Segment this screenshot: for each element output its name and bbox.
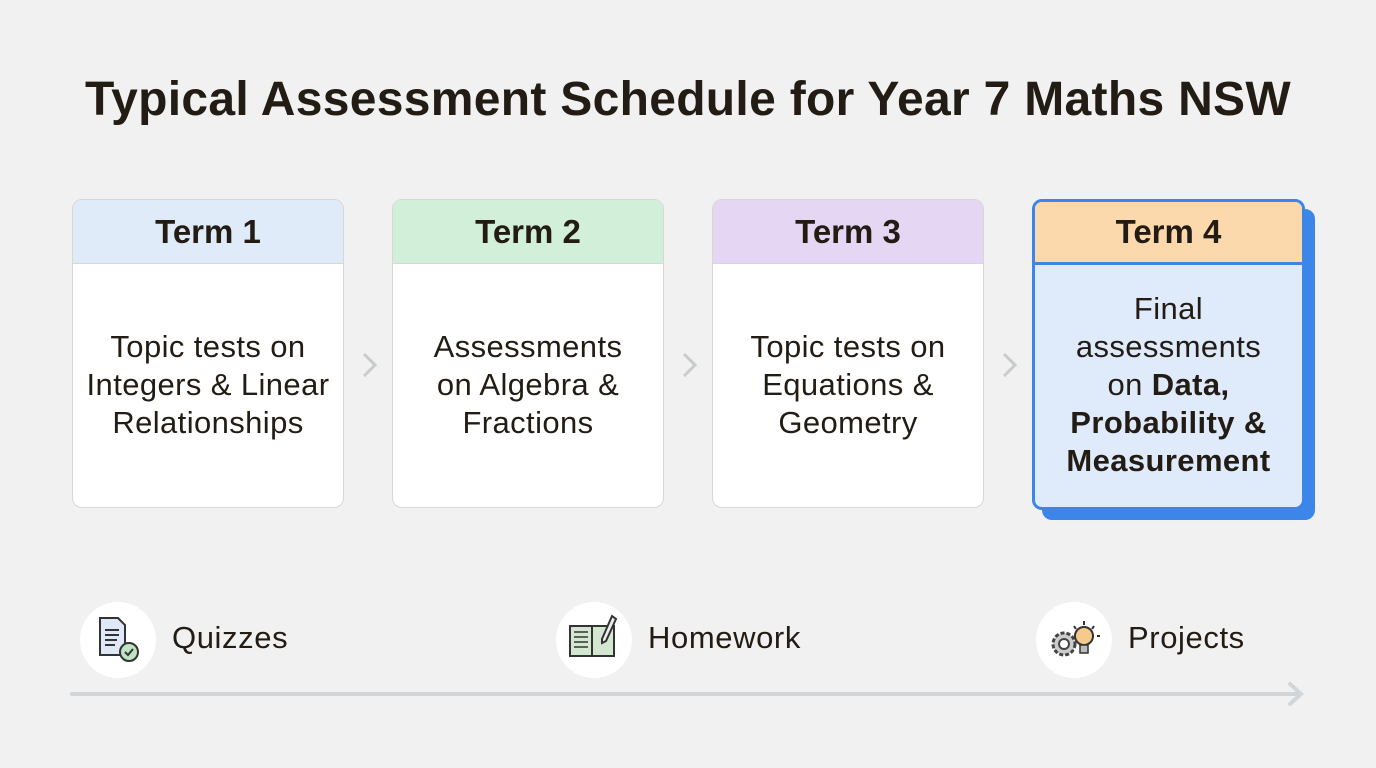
panel: term 1: Integers & Linear (87, 367, 329, 402)
panel: term 4 highlighted: on Data, (1107, 366, 1230, 402)
panel: term 1: Topic tests on (110, 329, 306, 364)
panel: term 3: Term 3 (795, 213, 901, 250)
panel: term 1 (72, 199, 344, 508)
panel: term 4 highlighted: Final (1134, 290, 1203, 326)
icon: quizzes (80, 602, 156, 678)
panel: term 4 highlighted (1032, 199, 1315, 520)
arrow: chevron 2 (683, 353, 697, 377)
panel: term 4 highlighted: Measurement (1066, 442, 1271, 478)
panel: term 2: Term 2 (475, 213, 581, 250)
panel: term 4 highlighted: Probability & (1070, 404, 1267, 440)
label: homework: Homework (648, 620, 801, 655)
panel: term 3: Equations & (762, 367, 934, 402)
panel: term 1: Term 1 (155, 213, 261, 250)
title: Typical Assessment Schedule for Year 7 Maths NSW (85, 73, 1291, 126)
label: quizzes: Quizzes (172, 620, 288, 655)
panel: term 3: Topic tests on (750, 329, 946, 364)
arrow: timeline (70, 682, 1304, 706)
icon: homework (556, 602, 632, 678)
arrow: chevron 1 (363, 353, 377, 377)
panel: term 4 highlighted: assessments (1076, 328, 1261, 364)
label: projects: Projects (1128, 620, 1245, 655)
panel: term 2: Assessments (434, 329, 622, 364)
panel: term 4 highlighted: Term 4 (1116, 213, 1221, 250)
panel: term 2: on Algebra & (437, 367, 619, 402)
panel: term 2: Fractions (462, 405, 594, 440)
panel: term 1: Relationships (112, 405, 304, 440)
icon: projects (1036, 602, 1112, 678)
arrow: chevron 3 (1003, 353, 1017, 377)
panel: term 2 (392, 199, 664, 508)
panel: term 3 (712, 199, 984, 508)
panel: term 3: Geometry (778, 405, 918, 440)
